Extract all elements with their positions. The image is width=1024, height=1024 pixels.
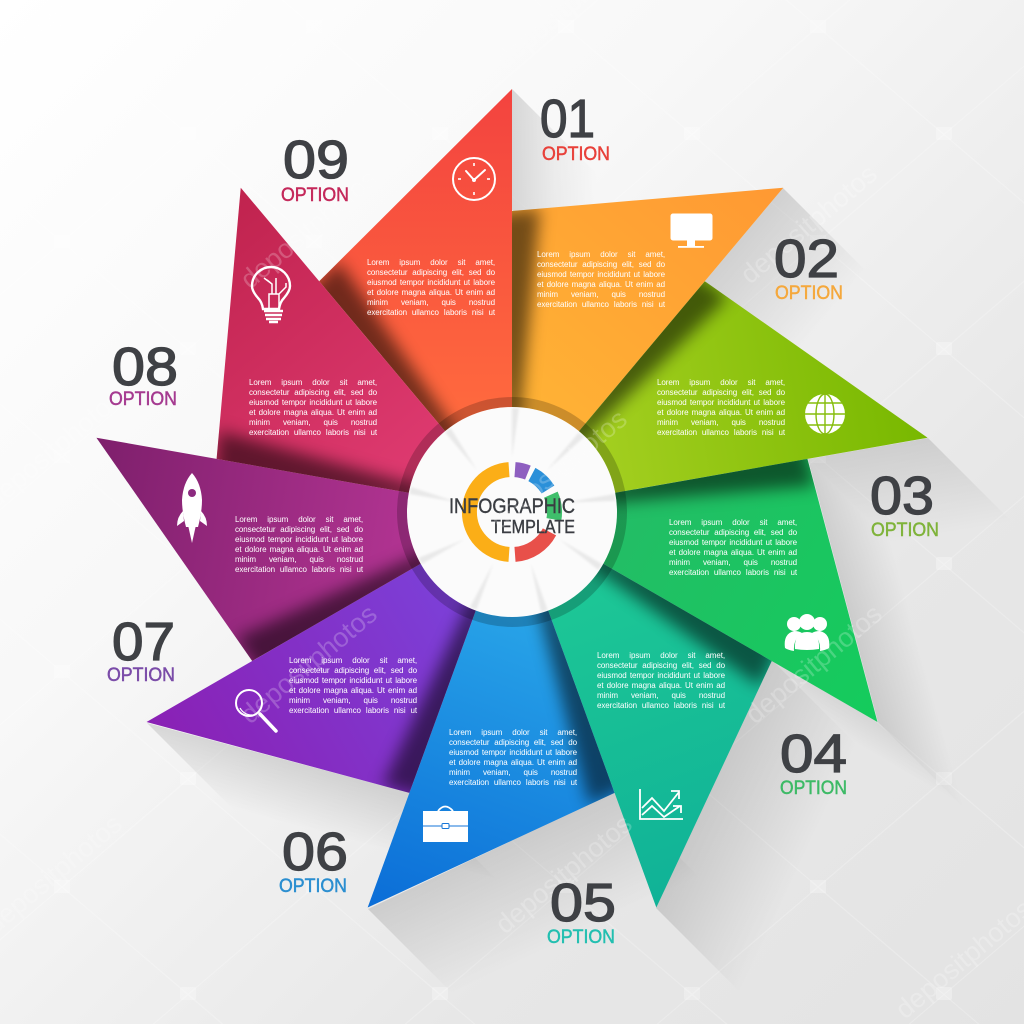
blade 06 blue: [368, 610, 614, 908]
text block 02: [537, 250, 666, 309]
icon: people: [785, 614, 829, 651]
long cast shadows: [147, 89, 1013, 994]
watermark: depositphotos: [735, 159, 883, 290]
label 06: [279, 822, 348, 897]
text block 08: Lorem ipsum dolor sit amet,: [235, 515, 363, 524]
icon: line chart: [640, 789, 683, 819]
label 09: 09: [283, 130, 349, 190]
text block 07: exercitation ullamco laboris nisi ut: [289, 706, 417, 715]
label 07: 07: [112, 612, 175, 672]
text block 09: eiusmod tempor incididunt ut labore: [249, 398, 377, 407]
label 01: [540, 89, 610, 165]
blade 05 teal: [548, 564, 772, 908]
blade 04 green: [603, 458, 878, 722]
text block 03: Lorem ipsum dolor sit amet,: [657, 378, 785, 387]
text block 01: exercitation ullamco laboris nisi ut: [367, 308, 495, 317]
blade 08 plum: [96, 438, 421, 661]
blade 01 red: [319, 89, 512, 432]
text block 07: Lorem ipsum dolor sit amet,: [289, 656, 417, 665]
blade 09 crimson: [216, 188, 445, 493]
text block 06: et dolore magna aliqua. Ut enim ad: [449, 758, 577, 767]
text block 04: eiusmod tempor incididunt ut labore: [669, 538, 797, 547]
text block 06: Lorem ipsum dolor sit amet,: [449, 728, 577, 737]
text block 03: eiusmod tempor incididunt ut labore: [657, 398, 785, 407]
text block 07: consectetur adipiscing elit, sed do: [289, 666, 417, 675]
text block 09: consectetur adipiscing elit, sed do: [249, 388, 377, 397]
text block 05: minim veniam, quis nostrud: [597, 691, 725, 700]
center title: TEMPLATE: [491, 517, 575, 537]
text block 09: [249, 378, 378, 437]
text block 03: exercitation ullamco laboris nisi ut: [657, 428, 785, 437]
text block 04: [669, 518, 798, 577]
icon: rocket: [177, 473, 207, 543]
text block 03: [657, 378, 786, 437]
label 07: OPTION: [107, 665, 175, 686]
watermark: depositphotos: [485, 404, 633, 535]
blade 03 lime: [579, 281, 928, 493]
text block 03: et dolore magna aliqua. Ut enim ad: [657, 408, 785, 417]
text block 02: minim veniam, quis nostrud: [537, 290, 665, 299]
text block 05: et dolore magna aliqua. Ut enim ad: [597, 681, 725, 690]
icon: magnifier: [236, 690, 276, 731]
text block 04: exercitation ullamco laboris nisi ut: [669, 568, 797, 577]
text block 09: exercitation ullamco laboris nisi ut: [249, 428, 377, 437]
label 04: OPTION: [780, 778, 847, 799]
text block 07: minim veniam, quis nostrud: [289, 696, 417, 705]
text block 09: minim veniam, quis nostrud: [249, 418, 377, 427]
text block 08: exercitation ullamco laboris nisi ut: [235, 565, 363, 574]
text block 09: Lorem ipsum dolor sit amet,: [249, 378, 377, 387]
text block 08: minim veniam, quis nostrud: [235, 555, 363, 564]
text block 05: exercitation ullamco laboris nisi ut: [597, 701, 725, 710]
text block 02: et dolore magna aliqua. Ut enim ad: [537, 280, 665, 289]
text block 05: consectetur adipiscing elit, sed do: [597, 661, 725, 670]
text block 08: eiusmod tempor incididunt ut labore: [235, 535, 363, 544]
watermark: depositphotos: [235, 599, 383, 730]
blade 02 orange: [512, 188, 784, 432]
icon: light bulb: [252, 267, 290, 322]
text block 06: minim veniam, quis nostrud: [449, 768, 577, 777]
label 09: [281, 130, 349, 206]
text block 07: eiusmod tempor incididunt ut labore: [289, 676, 417, 685]
text block 06: exercitation ullamco laboris nisi ut: [449, 778, 577, 787]
text block 08: et dolore magna aliqua. Ut enim ad: [235, 545, 363, 554]
text block 05: Lorem ipsum dolor sit amet,: [597, 651, 725, 660]
text block 01: consectetur adipiscing elit, sed do: [367, 268, 495, 277]
center title: INFOGRAPHIC: [449, 495, 575, 518]
label 02: 02: [774, 229, 839, 289]
icon: clock: [453, 158, 495, 200]
label 05: 05: [550, 873, 616, 933]
label 06: 06: [282, 822, 348, 882]
text block 06: consectetur adipiscing elit, sed do: [449, 738, 577, 747]
text block 04: et dolore magna aliqua. Ut enim ad: [669, 548, 797, 557]
text block 01: et dolore magna aliqua. Ut enim ad: [367, 288, 495, 297]
watermark: depositphotos: [235, 164, 383, 295]
icon: briefcase: [423, 806, 468, 842]
icon: monitor: [671, 214, 712, 248]
text block 06: [449, 728, 578, 787]
donut chart: [469, 470, 555, 554]
center hub: [402, 402, 622, 622]
label 06: OPTION: [279, 876, 347, 897]
text block 01: Lorem ipsum dolor sit amet,: [367, 258, 495, 267]
label 04: 04: [780, 724, 847, 784]
text block 09: et dolore magna aliqua. Ut enim ad: [249, 408, 377, 417]
label 02: OPTION: [775, 283, 843, 304]
watermark: depositphotos: [740, 599, 888, 730]
text block 08: consectetur adipiscing elit, sed do: [235, 525, 363, 534]
label 01: OPTION: [542, 144, 610, 165]
text block 01: [367, 258, 496, 317]
label 03: OPTION: [871, 520, 939, 541]
label 05: [547, 873, 616, 948]
text block 01: minim veniam, quis nostrud: [367, 298, 495, 307]
icon: globe: [805, 394, 845, 434]
text block 04: Lorem ipsum dolor sit amet,: [669, 518, 797, 527]
text block 02: exercitation ullamco laboris nisi ut: [537, 300, 665, 309]
text block 05: eiusmod tempor incididunt ut labore: [597, 671, 725, 680]
text block 07: [289, 656, 418, 715]
label 05: OPTION: [547, 927, 615, 948]
label 01: 01: [540, 89, 595, 149]
text block 05: [597, 651, 726, 710]
text block 06: eiusmod tempor incididunt ut labore: [449, 748, 577, 757]
text block 03: minim veniam, quis nostrud: [657, 418, 785, 427]
text block 04: minim veniam, quis nostrud: [669, 558, 797, 567]
label 03: [870, 466, 939, 541]
label 03: 03: [870, 466, 934, 526]
text block 02: consectetur adipiscing elit, sed do: [537, 260, 665, 269]
text block 01: eiusmod tempor incididunt ut labore: [367, 278, 495, 287]
text block 08: [235, 515, 364, 574]
text block 02: Lorem ipsum dolor sit amet,: [537, 250, 665, 259]
label 09: OPTION: [281, 185, 349, 206]
text block 03: consectetur adipiscing elit, sed do: [657, 388, 785, 397]
center title: [449, 495, 575, 537]
text block 04: consectetur adipiscing elit, sed do: [669, 528, 797, 537]
label 08: 08: [112, 337, 178, 397]
blade 07 violet: [146, 564, 476, 793]
label 02: [774, 229, 843, 304]
label 08: OPTION: [109, 389, 177, 410]
text block 07: et dolore magna aliqua. Ut enim ad: [289, 686, 417, 695]
watermark: depositphotos: [490, 809, 638, 940]
text block 02: eiusmod tempor incididunt ut labore: [537, 270, 665, 279]
